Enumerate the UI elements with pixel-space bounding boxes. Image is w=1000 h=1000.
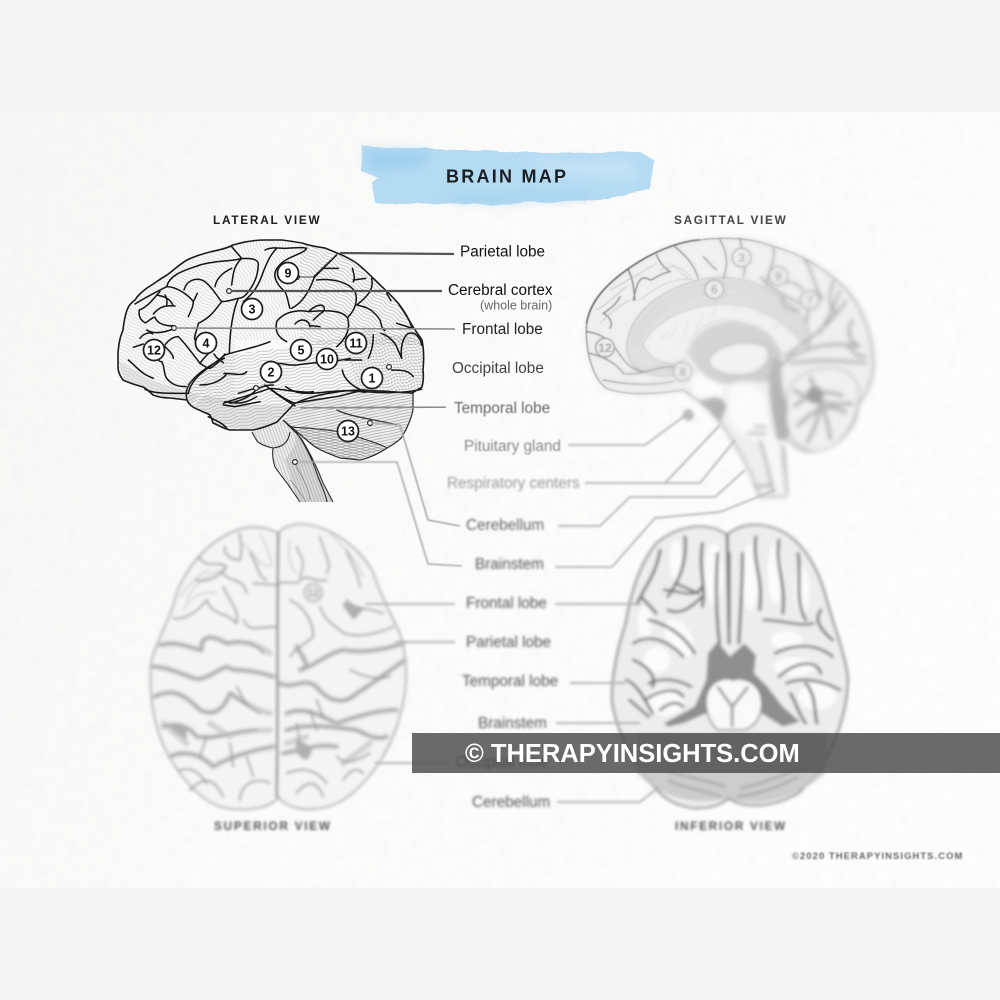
leader: parietal lobe [340, 253, 454, 254]
label: parietal lobe, lower: Parietal lobe [466, 634, 551, 651]
brainstem [252, 420, 334, 502]
label: pituitary gland: Pituitary gland [464, 438, 561, 455]
temporal lobe front contour [186, 358, 225, 400]
marker numbers: 13 [341, 424, 355, 438]
sagittal leader lines [555, 412, 775, 567]
temporal sulci [208, 388, 397, 428]
leader: temporal lobe [300, 407, 446, 408]
lower leader lines [365, 604, 658, 802]
illustration: lateral view of brain [115, 238, 425, 510]
paper texture [0, 112, 1000, 888]
label: cerebral cortex: Cerebral cortex [448, 282, 553, 299]
marker numbers: 2 [268, 366, 275, 380]
leader lines and labels for lower views [214, 595, 963, 861]
marker numbers: 12 [147, 344, 161, 358]
marker numbers: 11 [349, 336, 363, 350]
watermark band [412, 733, 1000, 773]
posterior sulci (right region) [265, 248, 422, 406]
leader lines and labels for sagittal view [447, 412, 775, 573]
label: occipital lobe, lower: Occipital lobe [456, 754, 548, 771]
marker numbers: 5 [298, 344, 305, 358]
label: parietal lobe: Parietal lobe [460, 244, 545, 260]
leader: cerebellum [372, 423, 460, 526]
label: frontal lobe, lower: Frontal lobe [466, 595, 547, 612]
cerebrum outline [118, 240, 424, 430]
label: whole brain: (whole brain) [480, 298, 552, 312]
label: temporal lobe, lower: Temporal lobe [462, 673, 558, 690]
leader: brainstem [297, 462, 462, 566]
illustration: inferior view of brain [612, 525, 848, 808]
illustration: sagittal view of brain [586, 238, 873, 497]
marker numbers: 1 [369, 372, 376, 386]
label: frontal lobe: Frontal lobe [462, 321, 543, 338]
marker numbers [147, 266, 376, 438]
heading: sagittal view: SAGITTAL VIEW [674, 213, 787, 227]
leader dots [172, 275, 391, 464]
cerebrum [118, 240, 424, 430]
watermark text: © THERAPYINSIGHTS.COM [465, 740, 800, 768]
illustration: superior view of brain: 12 [307, 588, 320, 600]
label: brainstem: Brainstem [475, 556, 544, 573]
marker numbers: 10 [320, 352, 334, 366]
label: temporal lobe: Temporal lobe [454, 400, 550, 417]
numbered markers [144, 262, 382, 442]
leader: parietal diagonal [297, 254, 337, 277]
title banner: watercolor swash [362, 146, 654, 205]
label: cerebellum, lower: Cerebellum [472, 794, 550, 811]
cortex hatching [115, 238, 425, 435]
leader: frontal lobe [176, 328, 455, 329]
marker numbers: 3 [249, 302, 256, 316]
frontal sulci (left region) [128, 247, 277, 403]
heading: lateral view: LATERAL VIEW [213, 213, 321, 227]
leader lines and labels for lateral view [176, 244, 553, 566]
label: brainstem, lower: Brainstem [478, 715, 547, 732]
label: occipital lobe: Occipital lobe [452, 360, 544, 377]
marker numbers: 9 [285, 266, 292, 280]
illustration: superior view of brain [151, 524, 406, 809]
leader: cerebral cortex [231, 290, 442, 292]
label: cerebellum: Cerebellum [466, 517, 544, 534]
heading: inferior view: INFERIOR VIEW [675, 819, 787, 833]
label: respiratory centers: Respiratory centers [447, 475, 580, 492]
credit line: ©2020 THERAPYINSIGHTS.COM [792, 850, 963, 861]
paper sheet [0, 112, 1000, 888]
leader: occipital lobe [391, 367, 446, 369]
cerebellum [280, 390, 415, 462]
title: BRAIN MAP [446, 166, 568, 186]
marker numbers: 4 [203, 336, 210, 350]
heading: superior view: SUPERIOR VIEW [214, 819, 332, 833]
